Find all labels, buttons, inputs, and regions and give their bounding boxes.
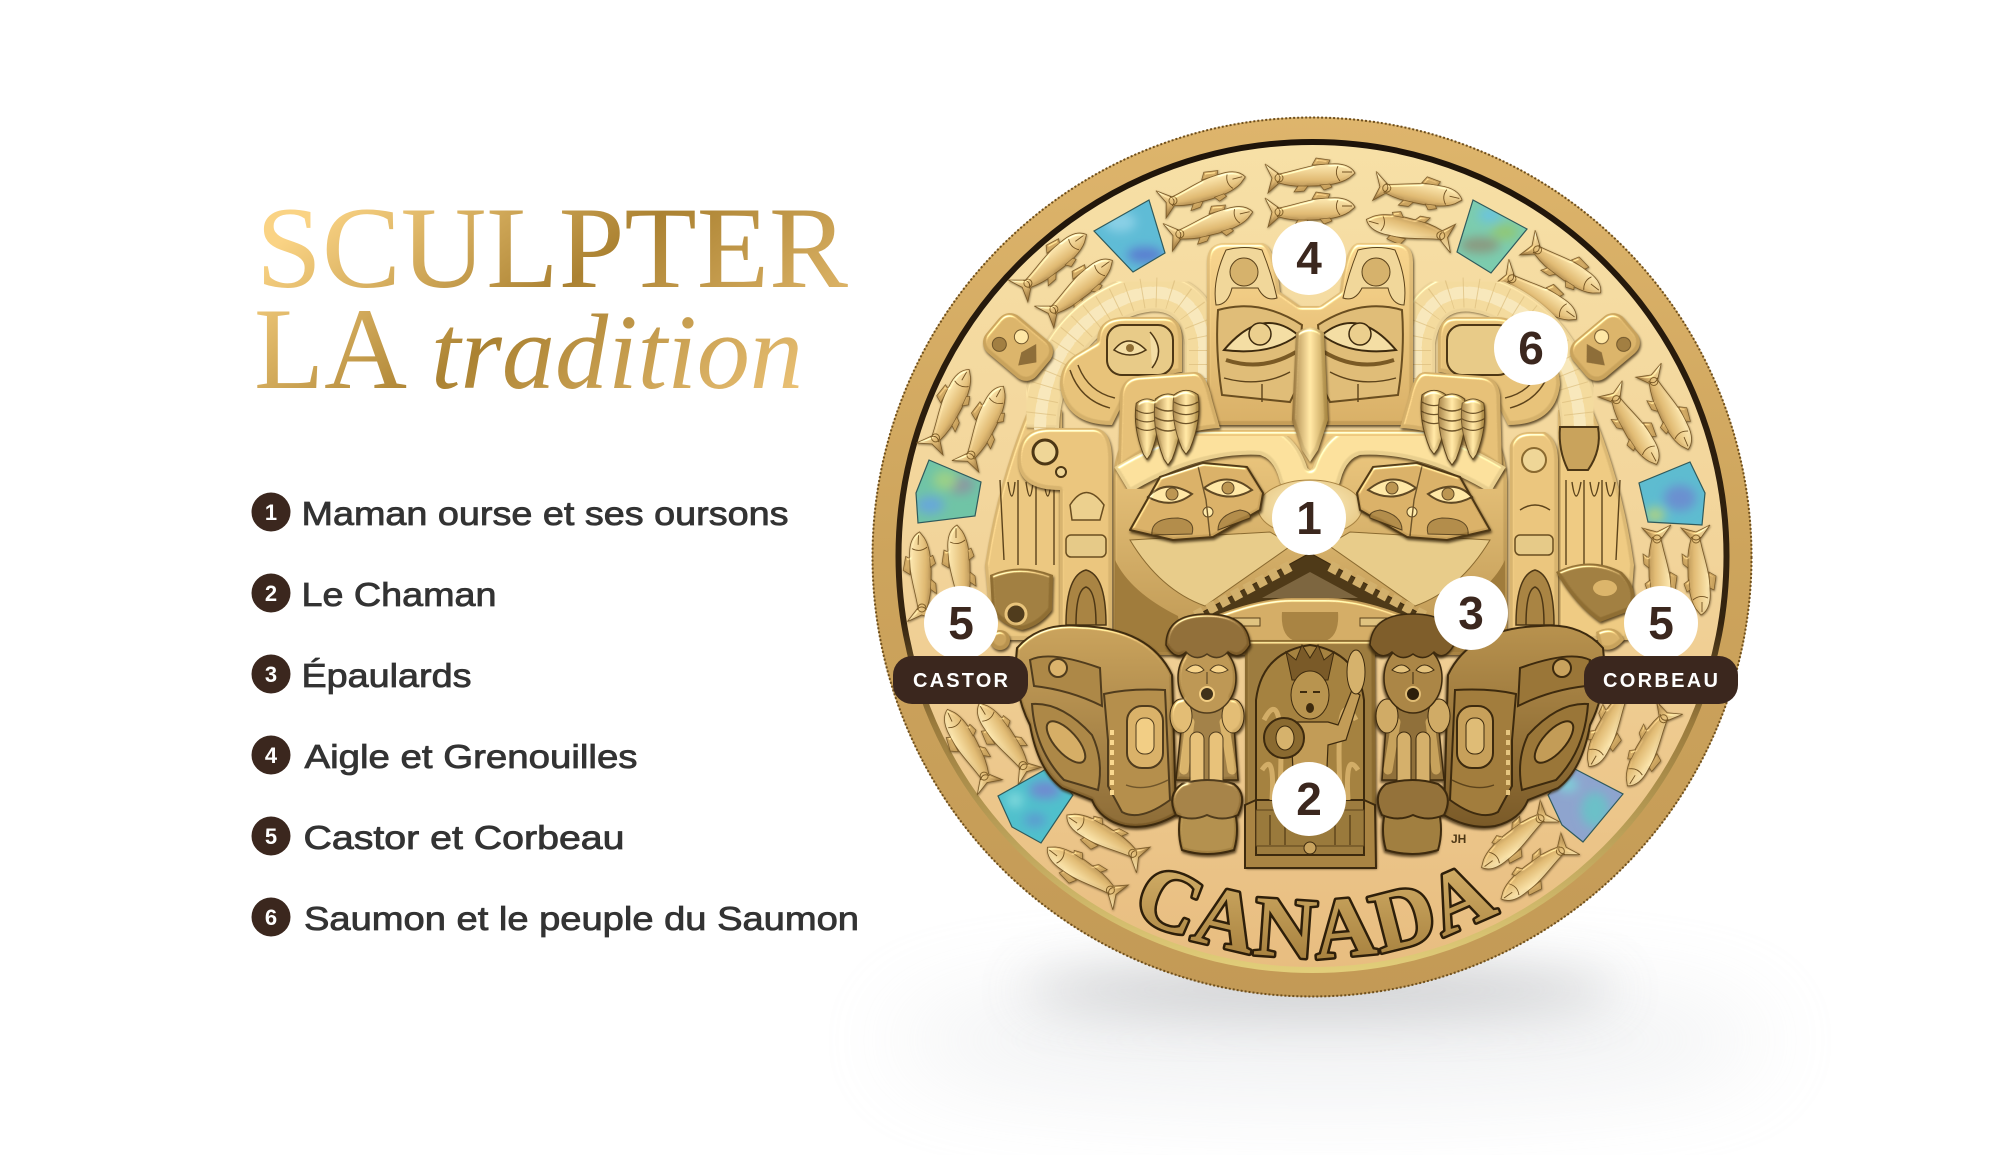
bear lower shading [1115,560,1505,652]
CANADA lettering: CANADA [1139,868,1502,962]
salmon people: scaled wings [1040,293,1580,428]
left scaled wing [1040,293,1204,428]
list item 4: Aigle et Grenouilles [304,738,638,775]
marker 2 [1272,762,1346,836]
salmon faces [977,307,1646,387]
opal left [915,459,982,524]
label: corbeau: CORBEAU [1603,670,1718,692]
marker 5 castor: 5 [948,597,974,649]
list item 2: Le Chaman [302,576,496,613]
opal top right [1456,199,1528,274]
salmon border [901,158,1716,914]
label: corbeau [1584,656,1738,704]
list item 1: 1 [265,500,277,525]
coin rim [872,117,1752,997]
title: Sculpter la tradition [254,184,848,414]
list item 2 [252,574,496,613]
list item 3: 3 [265,662,277,687]
marker 5 corbeau: 5 [1648,597,1674,649]
heading line: LA: LA [254,285,407,414]
shaman figure [1264,645,1365,790]
list item 5: 5 [265,824,277,849]
list item 4: 4 [265,743,278,768]
label: castor [893,656,1028,704]
eagle eyes [1217,306,1403,402]
list item 5: Castor et Corbeau [304,819,624,856]
raven [1556,564,1634,650]
bear body [1113,430,1507,655]
bear snout and cheeks [1130,480,1490,606]
list item 6: 6 [265,905,277,930]
coin [872,116,1752,998]
list item 3 [252,654,472,694]
marker 1: 1 [1296,492,1322,544]
frogs [1215,248,1405,305]
brow band [1122,440,1498,485]
opal right [1638,461,1706,526]
right scaled wing [1416,293,1580,428]
heading line: SCULPTER: SCULPTER [256,184,848,313]
orca right [1444,625,1604,827]
salmon body panels [1060,317,1560,425]
coin field [898,142,1726,970]
bear block [1113,328,1507,655]
claws [1135,390,1485,465]
opal lower left [997,769,1074,844]
eagle block with frogs [1207,243,1413,425]
list item 6: Saumon et le peuple du Saumon [304,900,859,937]
legend list [252,492,859,937]
heading line: tradition: tradition [431,294,803,412]
marker 2: 2 [1296,773,1322,825]
eagle head [1207,243,1413,425]
marker 1 [1272,481,1346,555]
eagle beak [1292,328,1328,462]
bear mouth [1181,553,1439,645]
list item 5 [252,816,624,856]
shoulders [1118,372,1502,470]
bear eye panels [1130,463,1490,540]
label: castor: CASTOR [913,670,1009,692]
feathers [1000,480,1620,565]
marker 4 [1272,221,1346,295]
side bodies [985,405,1634,640]
marker 5 castor [924,586,998,660]
marker 3 [1434,576,1508,650]
crouching figures [1166,614,1454,854]
engraver initials: JH [1451,832,1466,846]
coin shadow [890,966,1770,1095]
orcas [1016,625,1604,827]
figure left [1166,614,1250,854]
salmon eye panels [1070,325,1550,408]
beaver mask [990,568,1053,650]
marker 6 [1494,311,1568,385]
markers [893,221,1738,836]
orca left [1016,625,1176,827]
list item 4 [252,736,638,775]
door frame [1245,800,1376,868]
marker 6: 6 [1518,322,1544,374]
left totem column [1018,428,1112,640]
marker 3: 3 [1458,587,1484,639]
list item 1: Maman ourse et ses oursons [302,495,788,532]
central alcove with shaman [1245,640,1376,868]
list item 2: 2 [265,581,277,606]
right totem column [1510,427,1599,640]
marker 4: 4 [1296,232,1322,284]
opal inlays [910,195,1710,847]
opal lower right [1547,769,1624,843]
opal top left [1093,199,1166,273]
figure right [1370,614,1454,854]
list item 3: Épaulards [302,657,472,694]
marker 5 corbeau [1624,586,1698,660]
